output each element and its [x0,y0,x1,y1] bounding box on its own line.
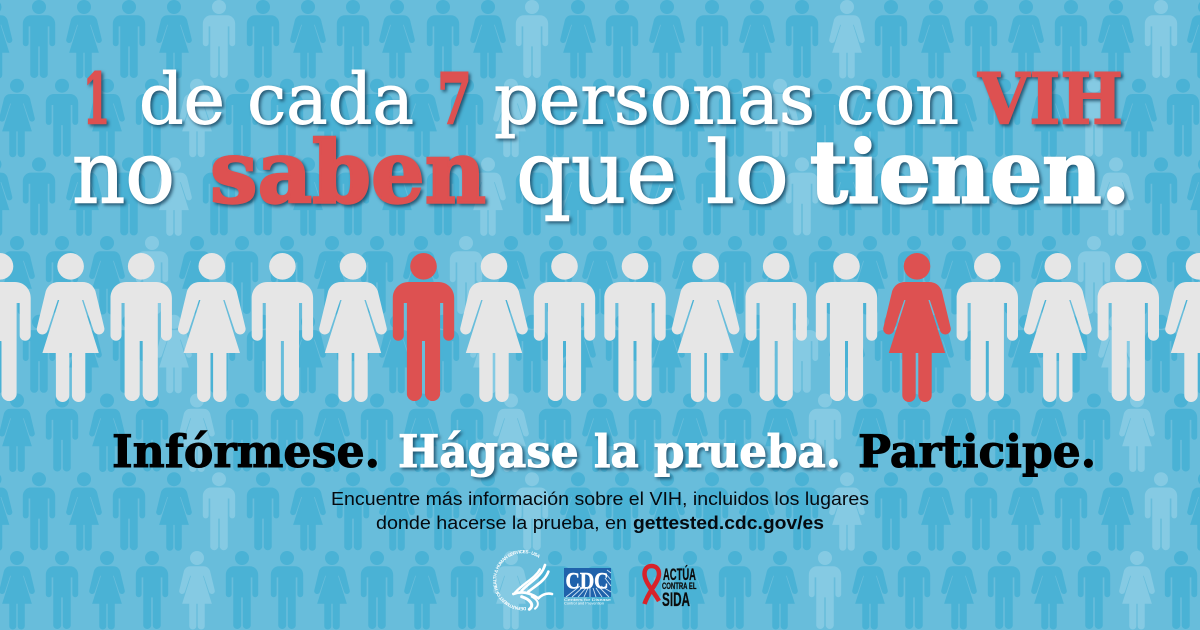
logo: Actúa contra el SIDA: CONTRA EL [662,581,697,591]
headline line 2 [72,122,1130,224]
headline line 1 [83,58,1123,140]
headline line 2: saben [210,122,486,224]
more information text: Encuentre más información sobre el VIH, incluidos los lugares [331,489,869,509]
logo: CDC: CDC [566,568,608,594]
logo: Actúa contra el SIDA: ACTÚA [663,565,696,584]
logo: CDC: Centers for Disease [564,598,611,602]
headline line 2: tienen. [810,122,1130,224]
headline line 1: 1 [83,58,110,140]
call to action heading: Participe. [858,425,1096,478]
call to action heading: Hágase la prueba. [398,425,841,478]
call to action heading: Infórmese. [112,425,380,478]
icon: red ribbon [644,566,659,604]
red woman [883,253,951,402]
more information text: gettested.cdc.gov/es [633,513,824,533]
red man [393,253,454,401]
headline line 1: 7 [437,58,472,140]
headline line 2: que [516,124,677,224]
logo: CDC: Control and Prevention [564,602,604,606]
headline line 1: con [836,58,959,140]
logo: Actúa contra el SIDA [644,565,697,611]
headline line 1: personas [494,58,815,140]
headline line 2: no [72,124,175,224]
more information text: donde hacerse la prueba, en [376,513,627,533]
logo: Actúa contra el SIDA: SIDA [662,589,690,611]
logo: HHS seal: DEPARTMENT OF HEALTH & HUMAN SERVICES · USA [493,550,540,610]
headline line 1: VIH [977,58,1123,140]
logo: CDC [564,568,611,606]
call to action heading [112,425,1096,478]
row of 18 people with two red figures [0,253,1200,402]
headline line 1: de cada [139,58,414,140]
headline line 2: lo [706,124,789,224]
more information text [331,489,869,533]
headline [72,58,1130,224]
